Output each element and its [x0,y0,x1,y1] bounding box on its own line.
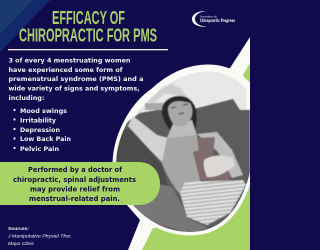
sources: Sources: [8,226,29,231]
symptom list [13,108,71,153]
callout: green band: menstrual-related pain. [29,195,120,203]
neck [167,120,197,138]
eyes and lips [171,104,188,108]
logo: Foundation for Chiropractic Progress: Chiropractic Progress [200,18,235,23]
photo: woman with hot water bottle on sofa [116,68,250,234]
corner accent: blue diagonal bands [0,0,50,52]
symptom list: Mood swings [20,108,67,115]
hot water bottle [193,137,230,180]
title divider [8,49,168,50]
title: EFFICACY OF [52,7,125,28]
far arm [197,132,243,178]
hair [162,96,197,130]
callout: green band: Performed by a doctor of [28,166,123,174]
hand on bottle [204,156,235,177]
intro paragraph: including: [8,95,44,102]
corner accent: bottom right green [142,170,250,250]
background [0,0,250,250]
forearm and hand [148,84,193,104]
face [168,101,192,127]
symptom list: Irritability [20,117,56,124]
logo: Foundation for Chiropractic Progress: Foundation for [200,14,218,18]
corner accent: top right white band [205,37,250,100]
intro paragraph: premenstrual syndrome (PMS) and a [8,76,144,83]
symptom list: Low Back Pain [20,136,71,143]
sources [7,226,72,246]
title: CHIROPRACTIC FOR PMS [19,25,157,46]
callout: green band: may provide relief from [30,186,120,194]
upper arm [128,116,168,164]
callout: green band [0,162,160,205]
sources: Mayo Clinic [8,241,35,246]
tank top [162,135,200,194]
sofa lower left [116,129,168,186]
wall books [145,103,165,110]
title [19,7,157,46]
sofa seat [133,184,208,232]
infographic canvas [0,0,250,250]
symptom list: Depression [20,127,60,134]
corner accent: top right green tip [243,63,250,88]
callout: green band: chiropractic, spinal adjustments [13,176,136,184]
intro paragraph: wide variety of signs and symptoms, [8,86,140,92]
symptom list: Pelvic Pain [20,146,59,153]
striped blanket [180,180,246,225]
corner accent: white strip lower middle [127,200,168,250]
sofa base [116,99,250,232]
logo: Foundation for Chiropractic Progress [192,11,235,27]
sources: J Manipulative Physiol Ther. [7,234,72,238]
intro paragraph: 3 of every 4 menstruating women [8,58,130,64]
intro paragraph [8,58,144,102]
intro paragraph: have experienced some form of [8,67,123,74]
